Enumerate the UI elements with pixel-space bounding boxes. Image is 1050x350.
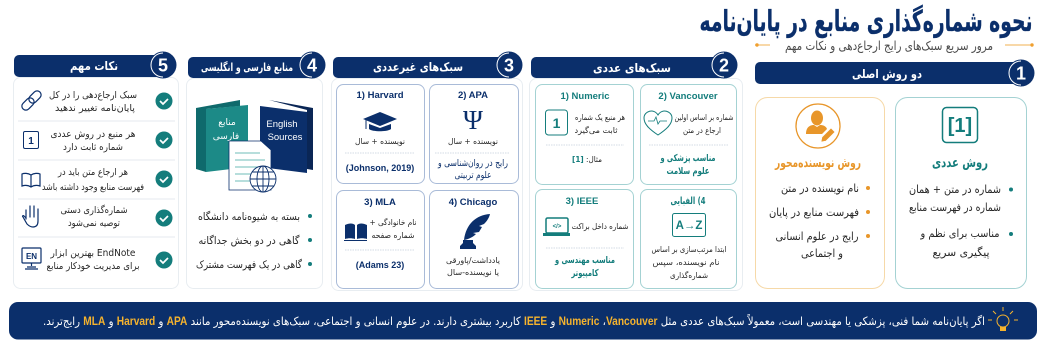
heading 4 <box>188 52 326 78</box>
callout: bottom note <box>9 302 1037 340</box>
point 3: فهرست منابع وجود داشته باشد <box>42 182 144 193</box>
icon: heart <box>644 111 672 135</box>
icon: EN monitor: EN <box>26 252 37 261</box>
callout: bottom note: اگر پایان‌نامه شما فنی، پزشکی یا مهندسی است، معمولاً سبک‌های عددی مثل Vancouver‏،‏ Numeric و IEEE کاربرد بیشتری دارند. در علوم انسانی و اجتماعی، سبک‌های نویسنده‌محور مانند APA و Harvard و MLA رایج‌ترند. <box>43 313 985 329</box>
illustration: books and document: English <box>266 119 298 130</box>
card: numeric method: شماره در فهرست منابع <box>909 201 1001 214</box>
card: IEEE: کامپیوتر <box>571 268 599 279</box>
card: alphabetical: شماره‌گذاری <box>670 270 708 280</box>
card: IEEE: 3) IEEE <box>566 196 598 207</box>
card: APA: 2) APA <box>458 90 488 101</box>
card: alphabetical: 4) الفبایی <box>670 196 706 207</box>
card: author method: نام نویسنده در متن <box>781 182 859 195</box>
icon: quill and ink <box>460 214 490 249</box>
card: IEEE: شماره داخل براکت <box>572 222 629 231</box>
heading 3: 3 <box>504 56 514 76</box>
bullet list: بسته به شیوه‌نامه دانشگاه <box>198 210 300 223</box>
card: Vancouver: 2) Vancouver <box>658 91 718 102</box>
illustration: books and document: Sources <box>268 132 303 143</box>
card: author method: رایج در علوم انسانی <box>776 230 858 243</box>
card: MLA: (Adams 23) <box>356 260 404 270</box>
icon: number box: 1 <box>28 136 34 147</box>
heading 5 <box>14 52 176 78</box>
card: Numeric <box>536 84 634 184</box>
card: author method: و اجتماعی <box>801 247 843 260</box>
icon: EN monitor <box>22 248 41 269</box>
icon: number box <box>24 132 38 148</box>
card: Vancouver <box>640 84 736 184</box>
heading 3: سبک‌های غیرعددی <box>373 60 463 74</box>
card: author method <box>756 98 884 288</box>
card: author method: روش نویسنده‌محور <box>774 156 861 171</box>
illustration: books and document: منابع <box>218 118 236 128</box>
card: numeric method <box>896 98 1026 288</box>
heading 1: دو روش اصلی <box>852 67 922 82</box>
icon: light bulb <box>988 307 1018 331</box>
icon: bracket one <box>942 108 978 142</box>
card: author method: فهرست منابع در پایان <box>769 206 859 219</box>
point 5 <box>22 248 172 272</box>
card: Chicago: 4) Chicago <box>449 197 497 208</box>
card: Numeric: هر منبع یک شماره <box>575 113 625 122</box>
card: Vancouver: ارجاع در متن <box>683 126 721 135</box>
icon: globe <box>250 166 276 192</box>
card: numeric method: شماره در متن + همان <box>909 183 1001 196</box>
icon: author with pen <box>796 104 840 148</box>
panel: numeric styles <box>530 52 742 290</box>
bullet list <box>196 210 312 271</box>
bullet list: گاهی در دو بخش جداگانه <box>198 234 300 247</box>
card: Vancouver: علوم سلامت <box>666 166 710 177</box>
card: APA: رایج در روان‌شناسی و <box>437 158 508 169</box>
icon: laptop: </> <box>553 224 562 230</box>
icon: graduation cap <box>363 112 397 131</box>
card: numeric method: پیگیری سریع <box>932 246 990 259</box>
point 1: پایان‌نامه تغییر ندهید <box>55 103 135 114</box>
card: Numeric: 1) Numeric <box>560 91 610 102</box>
card: numeric method: روش عددی <box>932 155 988 171</box>
card: MLA: 3) MLA <box>364 197 396 208</box>
icon: open book <box>344 224 367 241</box>
card: Vancouver: شماره بر اساس اولین <box>674 113 734 122</box>
card: Vancouver: مناسب پزشکی و <box>660 153 716 164</box>
icon: chain link <box>20 89 43 112</box>
card: Numeric: ثابت می‌گیرد <box>574 125 618 135</box>
card: Numeric: مثال: [1] <box>572 155 602 164</box>
card: Harvard: نویسنده + سال <box>355 137 405 146</box>
card: Harvard <box>336 84 424 184</box>
card: Chicago: یادداشت/پاورقی <box>446 256 500 265</box>
icon: bracket one: [1] <box>948 115 972 137</box>
heading 2 <box>531 52 738 78</box>
point 4: شماره‌گذاری دستی <box>60 204 128 216</box>
point 2: هر منبع در روش عددی <box>50 129 136 140</box>
point 1: سبک ارجاع‌دهی را در کل <box>49 90 137 101</box>
heading 2: سبک‌های عددی <box>593 61 671 75</box>
card: APA <box>430 84 518 184</box>
heading 4: منابع فارسی و انگلیسی <box>201 61 293 74</box>
card: MLA <box>336 190 424 288</box>
card: Harvard: 1) Harvard <box>356 90 404 101</box>
point 3 <box>22 167 172 193</box>
illustration: books and document <box>196 100 313 192</box>
point 4 <box>23 204 173 229</box>
heading 2: 2 <box>719 56 729 76</box>
card: IEEE <box>536 190 634 288</box>
icon: number one box: 1 <box>553 115 561 131</box>
heading 1 <box>755 60 1034 86</box>
point 1 <box>20 89 172 114</box>
card: alphabetical <box>640 190 736 288</box>
panel: Persian and English sources <box>186 52 326 288</box>
panel: two main methods <box>755 60 1034 288</box>
card: numeric method: مناسب برای نظم و <box>920 227 1000 240</box>
heading 5: نکات مهم <box>70 59 118 73</box>
icon: hand <box>23 206 38 227</box>
card: Harvard: (Johnson, 2019) <box>346 163 414 173</box>
point 5: برای مدیریت خودکار منابع <box>46 261 140 272</box>
panel: non-numeric styles <box>332 52 522 290</box>
card: alphabetical: ابتدا مرتب‌سازی بر اساس <box>652 245 726 254</box>
icon: book <box>22 173 40 187</box>
card: MLA: شماره صفحه <box>372 231 415 240</box>
point 5: EndNote بهترین ابزار <box>50 248 136 259</box>
card: Chicago: یا نویسنده-سال <box>447 268 499 277</box>
card: Chicago <box>430 190 518 288</box>
icon: psi: Ψ <box>463 105 483 135</box>
card: APA: علوم تربیتی <box>454 170 492 181</box>
card: MLA: نام خانوادگی + <box>370 217 416 227</box>
card: APA: نویسنده + سال <box>448 137 498 146</box>
illustration: books and document: فارسی <box>213 132 239 142</box>
point 3: هر ارجاع متن باید در <box>57 167 128 178</box>
point 2: شماره ثابت دارد <box>63 142 123 153</box>
icon: A to Z: A→Z <box>676 220 702 232</box>
heading 4: 4 <box>307 56 317 76</box>
panel: key points <box>14 52 178 288</box>
bullet list: گاهی در یک فهرست مشترک <box>196 258 302 271</box>
heading 1: 1 <box>1016 64 1026 84</box>
heading 5: 5 <box>158 56 168 76</box>
point 2 <box>24 129 172 153</box>
heading 3 <box>333 52 522 78</box>
point 4: توصیه نمی‌شود <box>68 218 120 229</box>
card: alphabetical: نام نویسنده، سپس <box>652 258 720 267</box>
subtitle: مرور سریع سبک‌های رایج ارجاع‌دهی و نکات مهم <box>785 38 993 54</box>
card: IEEE: مناسب مهندسی و <box>554 255 615 266</box>
